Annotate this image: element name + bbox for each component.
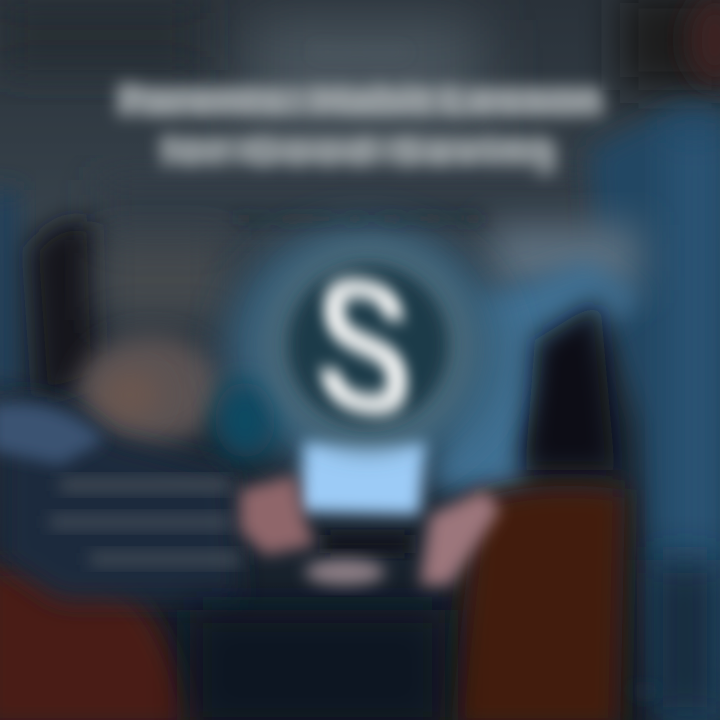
title [115, 74, 605, 176]
icon: dollar coin [264, 232, 472, 462]
blue glow around coin [215, 225, 505, 475]
subtitle text: Money lessons [313, 43, 407, 59]
red chair left [0, 563, 195, 720]
boy in striped hoodie [0, 221, 240, 600]
hands holding phone [240, 475, 500, 585]
adult figure in blue denim [430, 0, 720, 720]
site watermark: logo [631, 682, 659, 699]
dark trousers [190, 610, 445, 720]
dollar sign: S [315, 232, 413, 462]
red chair right [450, 486, 625, 720]
subtitle text [234, 43, 486, 228]
phone screen [298, 440, 425, 553]
title: Parents: Habit Lesson [115, 74, 605, 126]
subtitle text: How parents can help their kids [234, 208, 486, 228]
title: for Good Saving [158, 127, 558, 176]
